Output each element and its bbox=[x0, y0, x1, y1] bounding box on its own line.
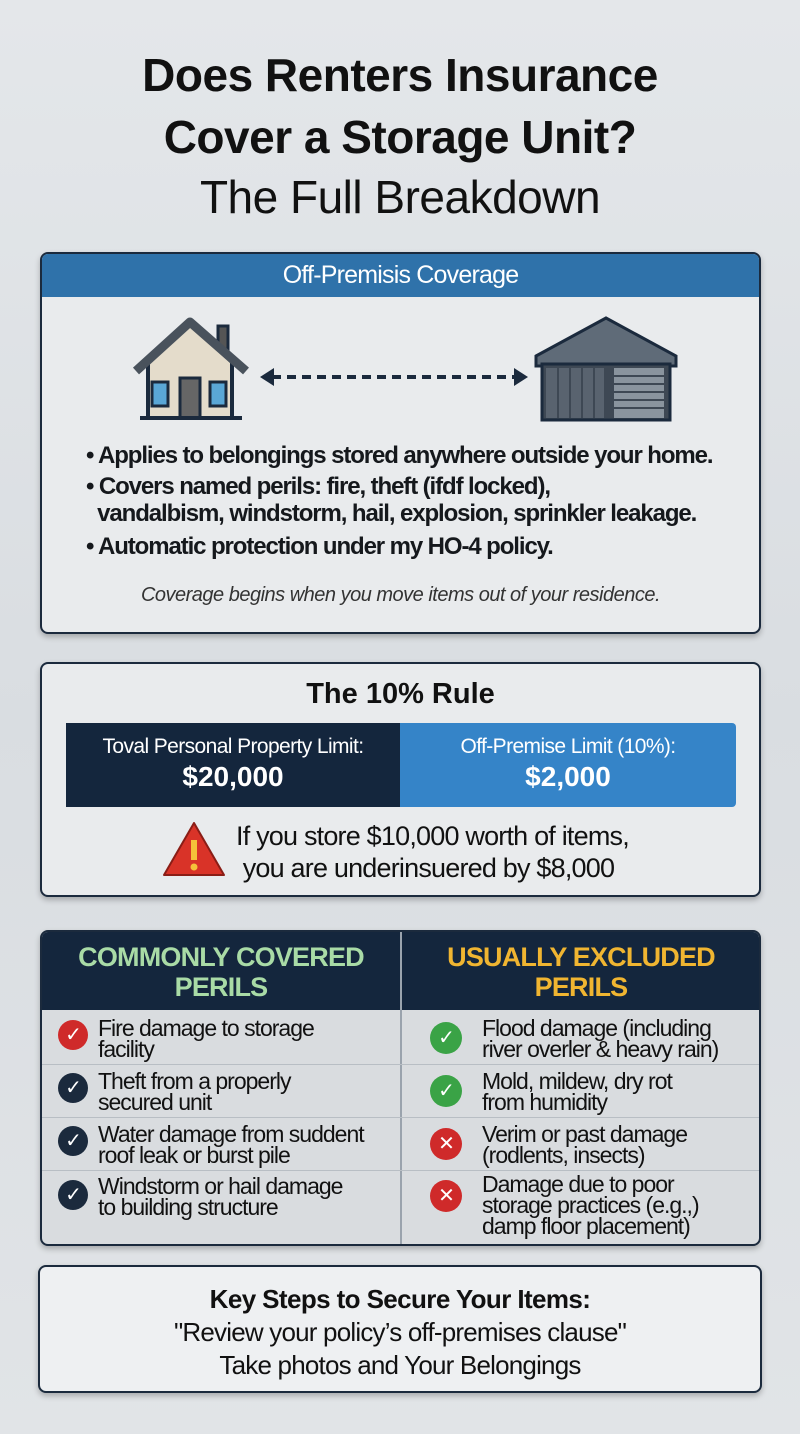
bullet list: • Automatic protection under my HO-4 policy. bbox=[86, 533, 553, 560]
covered list bbox=[58, 1015, 364, 1220]
note: Coverage begins when you move items out of your residence. bbox=[141, 584, 660, 606]
panel: 10% rule bbox=[40, 662, 761, 897]
panel: perils table bbox=[40, 930, 761, 1246]
panel: perils table: Mold, mildew, dry rot bbox=[482, 1068, 672, 1094]
title: Does Renters Insurance bbox=[142, 49, 658, 101]
panel: perils table: Damage due to poor bbox=[482, 1171, 674, 1197]
warning text bbox=[236, 821, 629, 883]
panel: perils table: from humidity bbox=[482, 1089, 607, 1115]
panel: perils table: ✓ bbox=[438, 1027, 454, 1049]
panel: perils table: secured unit bbox=[98, 1089, 211, 1115]
icon: storage unit bbox=[534, 316, 678, 422]
panel: perils table: storage practices (e.g.,) bbox=[482, 1192, 699, 1218]
panel: perils table: Flood damage (including bbox=[482, 1015, 711, 1041]
panel: off-premises coverage bbox=[40, 252, 761, 634]
bullet list bbox=[86, 442, 712, 560]
panel header bbox=[42, 254, 759, 297]
panel: perils table: ✕ bbox=[438, 1133, 454, 1155]
panel: perils table: Fire damage to storage bbox=[98, 1015, 314, 1041]
icon: warning bbox=[163, 822, 225, 876]
panel: perils table: river overler & heavy rain) bbox=[482, 1036, 718, 1062]
panel: perils table: roof leak or burst pile bbox=[98, 1142, 290, 1168]
panel: perils table: ✓ bbox=[65, 1130, 81, 1152]
bar: limits: Toval Personal Property Limit: bbox=[103, 735, 363, 758]
header: excluded bbox=[402, 932, 760, 1010]
bullet list: • Applies to belongings stored anywhere outside your home. bbox=[86, 442, 712, 469]
excluded list bbox=[430, 1015, 718, 1239]
panel: perils table: ✓ bbox=[65, 1077, 81, 1099]
panel: perils table: ✓ bbox=[65, 1024, 81, 1046]
panel: perils table: ✓ bbox=[438, 1080, 454, 1102]
panel header: Off-Premisis Coverage bbox=[283, 261, 518, 289]
arrow: dashed double arrow bbox=[260, 368, 528, 386]
header: excluded: USUALLY EXCLUDED bbox=[447, 942, 715, 972]
panel: key steps: Key Steps to Secure Your Items: bbox=[210, 1284, 590, 1314]
panel: perils table: Water damage from suddent bbox=[98, 1121, 364, 1147]
header: covered: COMMONLY COVERED bbox=[78, 942, 364, 972]
panel: perils table: damp floor placement) bbox=[482, 1213, 690, 1239]
warning text: If you store $10,000 worth of items, bbox=[236, 821, 629, 851]
icon: house bbox=[133, 318, 249, 420]
bullet list: • Covers named perils: fire, theft (ifdf locked), bbox=[86, 473, 550, 500]
header: covered bbox=[42, 932, 400, 1010]
panel: perils table: ✕ bbox=[438, 1185, 454, 1207]
panel: perils table: Windstorm or hail damage bbox=[98, 1173, 342, 1199]
header: covered: PERILS bbox=[175, 972, 267, 1002]
warning text: you are underinsuered by $8,000 bbox=[243, 853, 614, 883]
panel: perils table: (rodlents, insects) bbox=[482, 1142, 645, 1168]
bar: limits: Off-Premise Limit (10%): bbox=[460, 735, 676, 758]
header: excluded: PERILS bbox=[535, 972, 627, 1002]
title bbox=[142, 49, 658, 223]
panel: perils table: Verim or past damage bbox=[482, 1121, 687, 1147]
bar: limits bbox=[66, 723, 736, 807]
title: The Full Breakdown bbox=[200, 171, 600, 223]
panel: perils table: Theft from a properly bbox=[98, 1068, 290, 1094]
panel: perils table: ✓ bbox=[65, 1184, 81, 1206]
title: Cover a Storage Unit? bbox=[164, 111, 636, 163]
panel: perils table: facility bbox=[98, 1036, 154, 1062]
panel: key steps: Take photos and Your Belongings bbox=[219, 1350, 581, 1380]
panel: key steps bbox=[38, 1265, 762, 1393]
panel: key steps: "Review your policy’s off-premises clause" bbox=[174, 1317, 626, 1347]
panel: perils table: to building structure bbox=[98, 1194, 278, 1220]
heading: The 10% Rule bbox=[306, 678, 495, 710]
bar: limits: $2,000 bbox=[525, 761, 611, 792]
bar: limits: $20,000 bbox=[182, 761, 284, 792]
bullet list: vandalbism, windstorm, hail, explosion, sprinkler leakage. bbox=[97, 500, 696, 527]
